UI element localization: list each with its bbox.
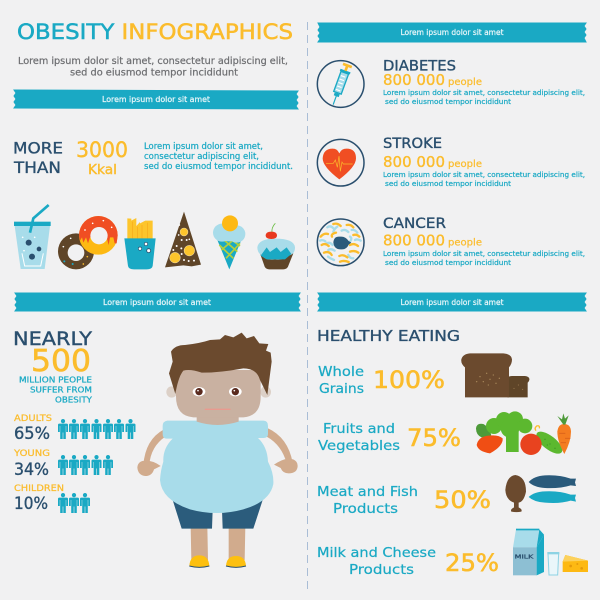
row: meat and fish [317, 484, 491, 517]
row: whole grains: Whole [318, 364, 364, 380]
legs [191, 527, 245, 560]
stat: adults: 65% [14, 424, 50, 443]
text: cancer: 800 000 [383, 232, 445, 250]
row: milk and cheese: 25% [445, 549, 499, 577]
calories description: consectetur adipiscing elit, [144, 152, 259, 162]
stat: young: 34% [14, 460, 49, 479]
stat: children: 10% [14, 494, 48, 513]
icon: milk and cheese: MILK [515, 555, 534, 561]
stat: young: YOUNG [13, 449, 50, 459]
icon: meat and fish [505, 475, 576, 512]
text: stroke: STROKE [383, 136, 442, 152]
food icons [14, 205, 295, 269]
text: cancer: sed do eiusmod tempor incididunt [385, 258, 511, 267]
ribbon: calories: Lorem ipsum dolor sit amet [102, 95, 210, 104]
icon: cupcake [257, 223, 295, 269]
3000 kkal figure: 3000 [76, 138, 128, 162]
text: stroke: Lorem ipsum dolor sit amet, consectetur adipiscing elit, [383, 170, 585, 179]
character: overweight boy [137, 333, 298, 567]
row: milk and cheese: Products [349, 562, 414, 578]
calories description [144, 142, 293, 172]
ears [166, 386, 177, 398]
intro text: Lorem ipsum dolor sit amet, consectetur adipiscing elit, [18, 56, 288, 67]
shoes [189, 555, 246, 567]
face [176, 370, 261, 417]
stat: adults: ADULTS [14, 414, 52, 424]
stat: adults [14, 414, 136, 443]
calories description: sed do eiusmod tempor incididunt. [144, 162, 293, 172]
icon: cancer cells [317, 219, 364, 266]
nearly 500 heading [13, 328, 92, 404]
calories description: Lorem ipsum dolor sit amet, [144, 142, 263, 152]
icon: milk and cheese [513, 529, 588, 575]
icon: drink cup [14, 205, 51, 269]
row: milk and cheese: Milk and Cheese [317, 545, 436, 561]
text: stroke: 800 000 [383, 153, 445, 171]
hands [137, 459, 298, 476]
icon: vegetables [476, 411, 571, 458]
ribbon: calories [14, 90, 298, 109]
text: diabetes: sed do eiusmod tempor incididunt [385, 97, 511, 106]
healthy eating heading: HEALTHY EATING [317, 327, 460, 345]
icon: ice cream cone [213, 215, 245, 269]
arms [143, 428, 293, 465]
icon: syringe [317, 61, 364, 107]
ribbon: diseases [318, 23, 586, 42]
row: fruits and vegetables: Vegetables [318, 438, 400, 454]
ribbon: diseases: Lorem ipsum dolor sit amet [400, 28, 504, 37]
text: stroke: people [448, 159, 482, 170]
eyes [193, 387, 205, 396]
more than label: THAN [13, 158, 61, 177]
icon: pizza slice [165, 212, 201, 267]
text: diabetes: Lorem ipsum dolor sit amet, consectetur adipiscing elit, [383, 88, 585, 97]
ribbon: nearly 500: Lorem ipsum dolor sit amet [103, 298, 211, 307]
intro text [18, 56, 288, 78]
ribbon: healthy eating [318, 293, 586, 311]
t-shirt [160, 421, 273, 513]
icon: donuts [58, 216, 118, 269]
text: diabetes: 800 000 [383, 71, 445, 89]
text: diabetes: people [448, 77, 482, 88]
row: whole grains: 100% [373, 366, 445, 394]
text: diabetes: DIABETES [383, 58, 456, 74]
intro text: sed do eiusmod tempor incididunt [70, 68, 238, 78]
text: cancer: CANCER [383, 216, 446, 232]
stat: children: CHILDREN [14, 484, 64, 494]
icon: bread [461, 353, 529, 397]
stat: children [14, 484, 90, 513]
row: milk and cheese [317, 545, 499, 578]
row: meat and fish: 50% [434, 486, 491, 514]
more than label [13, 138, 63, 177]
hair [169, 333, 272, 395]
row: fruits and vegetables: Fruits and [323, 421, 395, 437]
title: OBESITY INFOGRAPHICS [17, 20, 293, 44]
icon: heart [317, 139, 364, 186]
neck [197, 412, 239, 425]
text: cancer: Lorem ipsum dolor sit amet, consectetur adipiscing elit, [383, 249, 585, 258]
row: fruits and vegetables: 75% [407, 424, 461, 452]
3000 kkal figure [76, 138, 128, 178]
nearly 500 heading: MILLION PEOPLE [19, 376, 92, 384]
text: stroke: sed do eiusmod tempor incididunt [385, 179, 511, 188]
nearly 500 heading: 500 [31, 344, 91, 379]
mouth [205, 409, 231, 410]
row: meat and fish: Products [333, 501, 398, 517]
nearly 500 heading: NEARLY [13, 328, 92, 350]
text: cancer [383, 216, 585, 267]
nearly 500 heading: SUFFER FROM [30, 386, 92, 394]
row: whole grains [318, 364, 445, 397]
text: diabetes [383, 58, 585, 106]
shorts [173, 500, 263, 529]
ribbon: nearly 500 [15, 293, 300, 311]
row: meat and fish: Meat and Fish [317, 484, 418, 500]
icon: fries [124, 218, 156, 269]
3000 kkal figure: Kkal [88, 163, 117, 178]
text: stroke [383, 136, 585, 188]
ribbon: healthy eating: Lorem ipsum dolor sit amet [400, 298, 504, 307]
row: whole grains: Grains [319, 381, 364, 397]
more than label: MORE [13, 138, 63, 158]
row: fruits and vegetables [318, 421, 461, 454]
text: cancer: people [448, 238, 482, 248]
nearly 500 heading: OBESITY [55, 396, 92, 404]
stat: young [13, 449, 113, 479]
